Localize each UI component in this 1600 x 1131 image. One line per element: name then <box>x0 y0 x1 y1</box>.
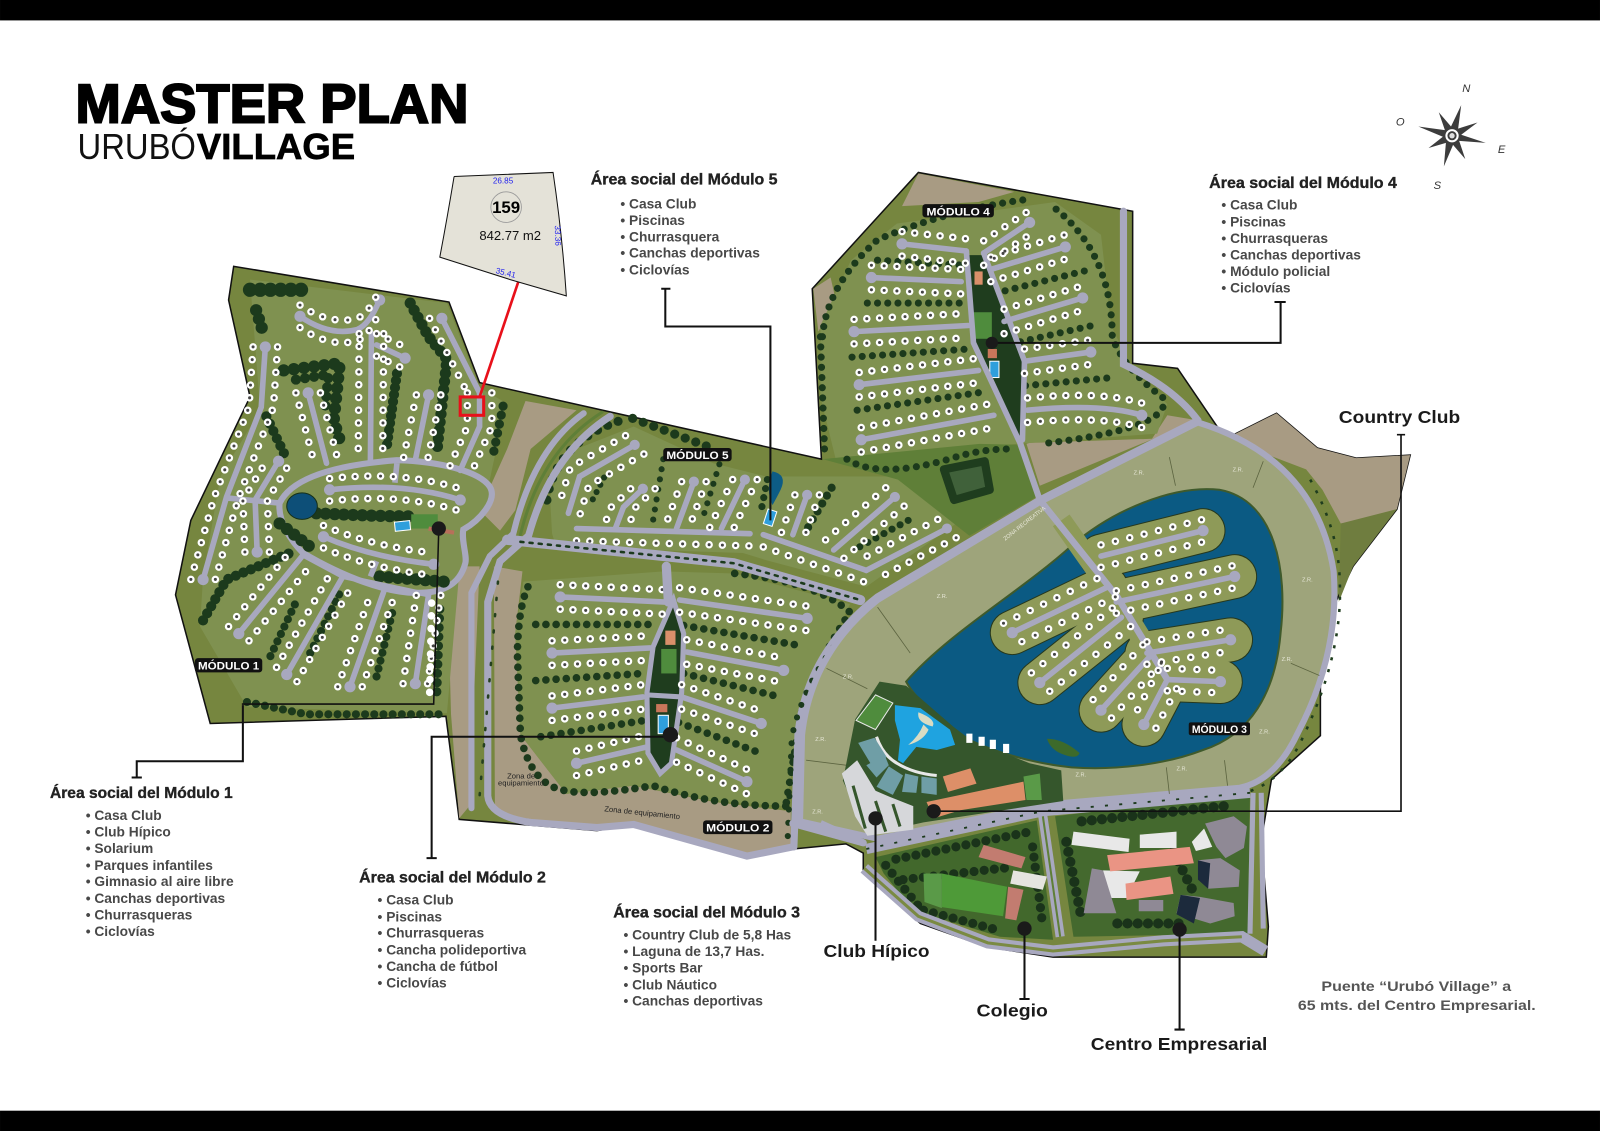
callout line: colegio <box>1019 929 1030 999</box>
module 5 tree clusters <box>547 418 974 551</box>
text: area social modulo 2: • Cancha de fútbol <box>378 959 498 974</box>
text: area social modulo 4: • Piscinas <box>1221 215 1286 230</box>
module label 4: MÓDULO 4 <box>927 205 990 218</box>
text: area social modulo 3 <box>613 902 800 1009</box>
callout line: club hipico <box>875 818 877 941</box>
text: area social modulo 1: • Canchas deportivas <box>86 891 226 906</box>
module 5 lots <box>547 418 974 587</box>
module label 1: MÓDULO 1 <box>198 659 259 672</box>
module 3: lake ring zone <box>800 422 1340 845</box>
text: area social modulo 4: • Ciclovías <box>1221 280 1291 295</box>
compass: N <box>1462 83 1471 95</box>
text: area social modulo 4: Área social del Módulo 4 <box>1209 173 1397 192</box>
zone labels: Zona de equipamiento <box>604 804 680 821</box>
olive patch on east edge <box>1339 509 1397 602</box>
compass: O <box>1396 117 1405 129</box>
country club <box>842 682 1063 836</box>
label: country club: Country Club <box>1339 407 1460 427</box>
module 1 pool and lawn <box>394 514 454 533</box>
module label 2: MÓDULO 2 <box>706 822 769 835</box>
top black bar <box>0 0 1600 20</box>
module label 4 <box>922 204 994 218</box>
callout lines <box>132 289 1405 1030</box>
text: area social modulo 5: Área social del Módulo 5 <box>591 170 778 189</box>
text: area social modulo 3: • Laguna de 13,7 Has. <box>623 944 764 959</box>
module 2 tree borders <box>517 573 850 806</box>
callout anchor dots <box>432 337 1187 937</box>
Z.R. lots ring <box>800 422 1334 839</box>
main roads <box>471 211 1198 856</box>
module label 3: MÓDULO 3 <box>1192 723 1247 736</box>
note: puente: Puente “Urubó Village” a <box>1321 979 1512 995</box>
text: area social modulo 5: • Piscinas <box>620 213 685 228</box>
text: area social modulo 4: • Churrasqueras <box>1221 231 1328 246</box>
text: area social modulo 1: • Club Hípico <box>86 825 171 840</box>
module label 2 <box>703 820 772 835</box>
text: area social modulo 1: • Solarium <box>86 841 153 856</box>
ring lot labels: Z.R. <box>1177 766 1188 772</box>
label: colegio: Colegio <box>977 1000 1048 1020</box>
text: area social modulo 2: • Piscinas <box>378 909 442 924</box>
compass <box>1396 83 1506 192</box>
text: area social modulo 2: • Churrasqueras <box>378 926 484 941</box>
module 1 pond <box>287 493 317 519</box>
callout line: module 4 <box>992 302 1286 343</box>
text: area social modulo 2 <box>359 868 546 991</box>
module 1 tree clusters <box>203 290 503 714</box>
text: area social modulo 3: • Sports Bar <box>623 960 703 975</box>
school buildings <box>979 845 1047 920</box>
module label 5: MÓDULO 5 <box>666 449 729 462</box>
text: area social modulo 1: • Casa Club <box>86 808 162 823</box>
callout line: module 5 <box>661 289 770 520</box>
module 2 lots <box>515 571 850 806</box>
ring lot labels: Z.R. <box>815 737 826 743</box>
club buildings <box>858 738 937 795</box>
bottom black bar <box>0 1111 1600 1131</box>
text: area social modulo 4: • Canchas deportivas <box>1221 248 1361 263</box>
compass: E <box>1498 144 1506 156</box>
selected lot marker <box>460 282 518 415</box>
lot 159 detail: 35.41 <box>495 266 517 280</box>
lake <box>906 489 1282 768</box>
module 4 central park <box>969 255 1023 439</box>
compass: S <box>1434 180 1442 192</box>
module 2 central park <box>647 600 684 773</box>
lot 159 detail <box>440 172 566 296</box>
colegio block <box>876 820 1053 940</box>
zone labels <box>498 772 680 821</box>
text: area social modulo 3: • Country Club de 5,8 Has <box>623 927 792 942</box>
text: area social modulo 1: • Ciclovías <box>86 924 155 939</box>
text: area social modulo 3: • Club Náutico <box>623 977 717 992</box>
peninsulas <box>1012 531 1235 724</box>
module 1 lots <box>191 280 506 714</box>
zone labels: equipamiento <box>498 779 544 788</box>
title: MASTER PLAN <box>76 72 468 134</box>
text: area social modulo 2: Área social del Módulo 2 <box>359 868 546 887</box>
text: area social modulo 1: Área social del Módulo 1 <box>50 783 233 802</box>
ring lot dividers <box>806 457 1319 794</box>
ring lot labels: Z.R. <box>1076 773 1087 779</box>
tan reserve zones <box>447 173 1410 857</box>
text: area social modulo 3: Área social del Módulo 3 <box>613 902 800 921</box>
text: area social modulo 5: • Canchas deportivas <box>620 246 760 261</box>
island <box>1047 739 1080 757</box>
text: area social modulo 2: • Cancha polideportiva <box>378 943 527 958</box>
lawn by courts <box>1023 773 1042 800</box>
lot 159 detail: 33.36 <box>553 225 562 246</box>
ring lot labels: Z.R. <box>1134 470 1145 476</box>
text: area social modulo 1: • Parques infantiles <box>86 858 213 873</box>
text: area social modulo 2: • Casa Club <box>378 893 454 908</box>
ring lot labels: Z.R. <box>1233 467 1244 473</box>
ring lot labels: Z.R. <box>843 675 854 681</box>
lot 159 detail: 842.77 m2 <box>479 228 541 243</box>
lot 159 detail: 159 <box>492 198 520 217</box>
ring lot labels: Z.R. <box>1302 578 1313 584</box>
text: area social modulo 1: • Gimnasio al aire libre <box>86 874 234 889</box>
text: area social modulo 5: • Ciclovías <box>620 262 690 277</box>
ring lot labels: Z.R. <box>937 594 948 600</box>
module label 5 <box>663 448 732 462</box>
ring lot labels: ZONA RECREATIVA <box>1003 506 1047 542</box>
text: area social modulo 4: • Casa Club <box>1221 198 1297 213</box>
callout line: module 2 <box>427 737 670 858</box>
parking <box>842 760 913 836</box>
text: area social modulo 3: • Canchas deportivas <box>623 994 763 1009</box>
lot 159 detail: 26.85 <box>493 177 514 186</box>
sports field <box>856 695 893 730</box>
module 5 water features <box>763 471 783 526</box>
text: area social modulo 4: • Módulo policial <box>1221 264 1330 279</box>
text: area social modulo 4 <box>1209 173 1397 295</box>
ring lot labels: Z.R. <box>812 809 823 815</box>
module 4 lots <box>820 199 1167 536</box>
grassy slope below module 4 <box>822 444 1040 536</box>
text: area social modulo 5 <box>591 170 778 277</box>
ring lot labels: Z.R. <box>1282 657 1293 663</box>
zone labels: Zona de <box>507 772 535 781</box>
lagoon pool <box>895 705 955 763</box>
text: area social modulo 2: • Ciclovías <box>378 976 447 991</box>
text: area social modulo 1 <box>50 783 234 939</box>
ring lot labels: Z.R. <box>1259 730 1270 736</box>
module 4 tree borders <box>820 199 1164 469</box>
football field <box>942 873 1007 916</box>
text: area social modulo 5: • Churrasquera <box>620 229 720 244</box>
marina piers <box>969 734 1006 753</box>
callout line: country club <box>934 435 1405 811</box>
tennis courts <box>927 768 1026 818</box>
title: VILLAGE <box>197 127 355 167</box>
forest patch <box>944 461 990 500</box>
note: puente <box>1298 979 1536 1014</box>
title: URUBÓ <box>78 127 196 167</box>
ring lot labels <box>812 467 1313 815</box>
callout line: module 1 <box>132 705 243 778</box>
callout line: centro empresarial <box>1174 930 1185 1030</box>
callout line: module 1 lower <box>242 529 439 704</box>
south roads <box>820 793 1265 951</box>
label: club hipico: Club Hípico <box>823 941 930 961</box>
text: area social modulo 5: • Casa Club <box>620 197 696 212</box>
text: area social modulo 1: • Churrasqueras <box>86 907 193 922</box>
walkway arc <box>877 737 937 775</box>
land base <box>176 172 1410 957</box>
note: puente: 65 mts. del Centro Empresarial. <box>1298 998 1536 1014</box>
label: centro empresarial: Centro Empresarial <box>1091 1034 1267 1054</box>
centro empresarial block <box>1055 793 1250 937</box>
master plan map <box>176 172 1410 957</box>
title <box>76 72 468 167</box>
oval central area <box>279 460 492 593</box>
